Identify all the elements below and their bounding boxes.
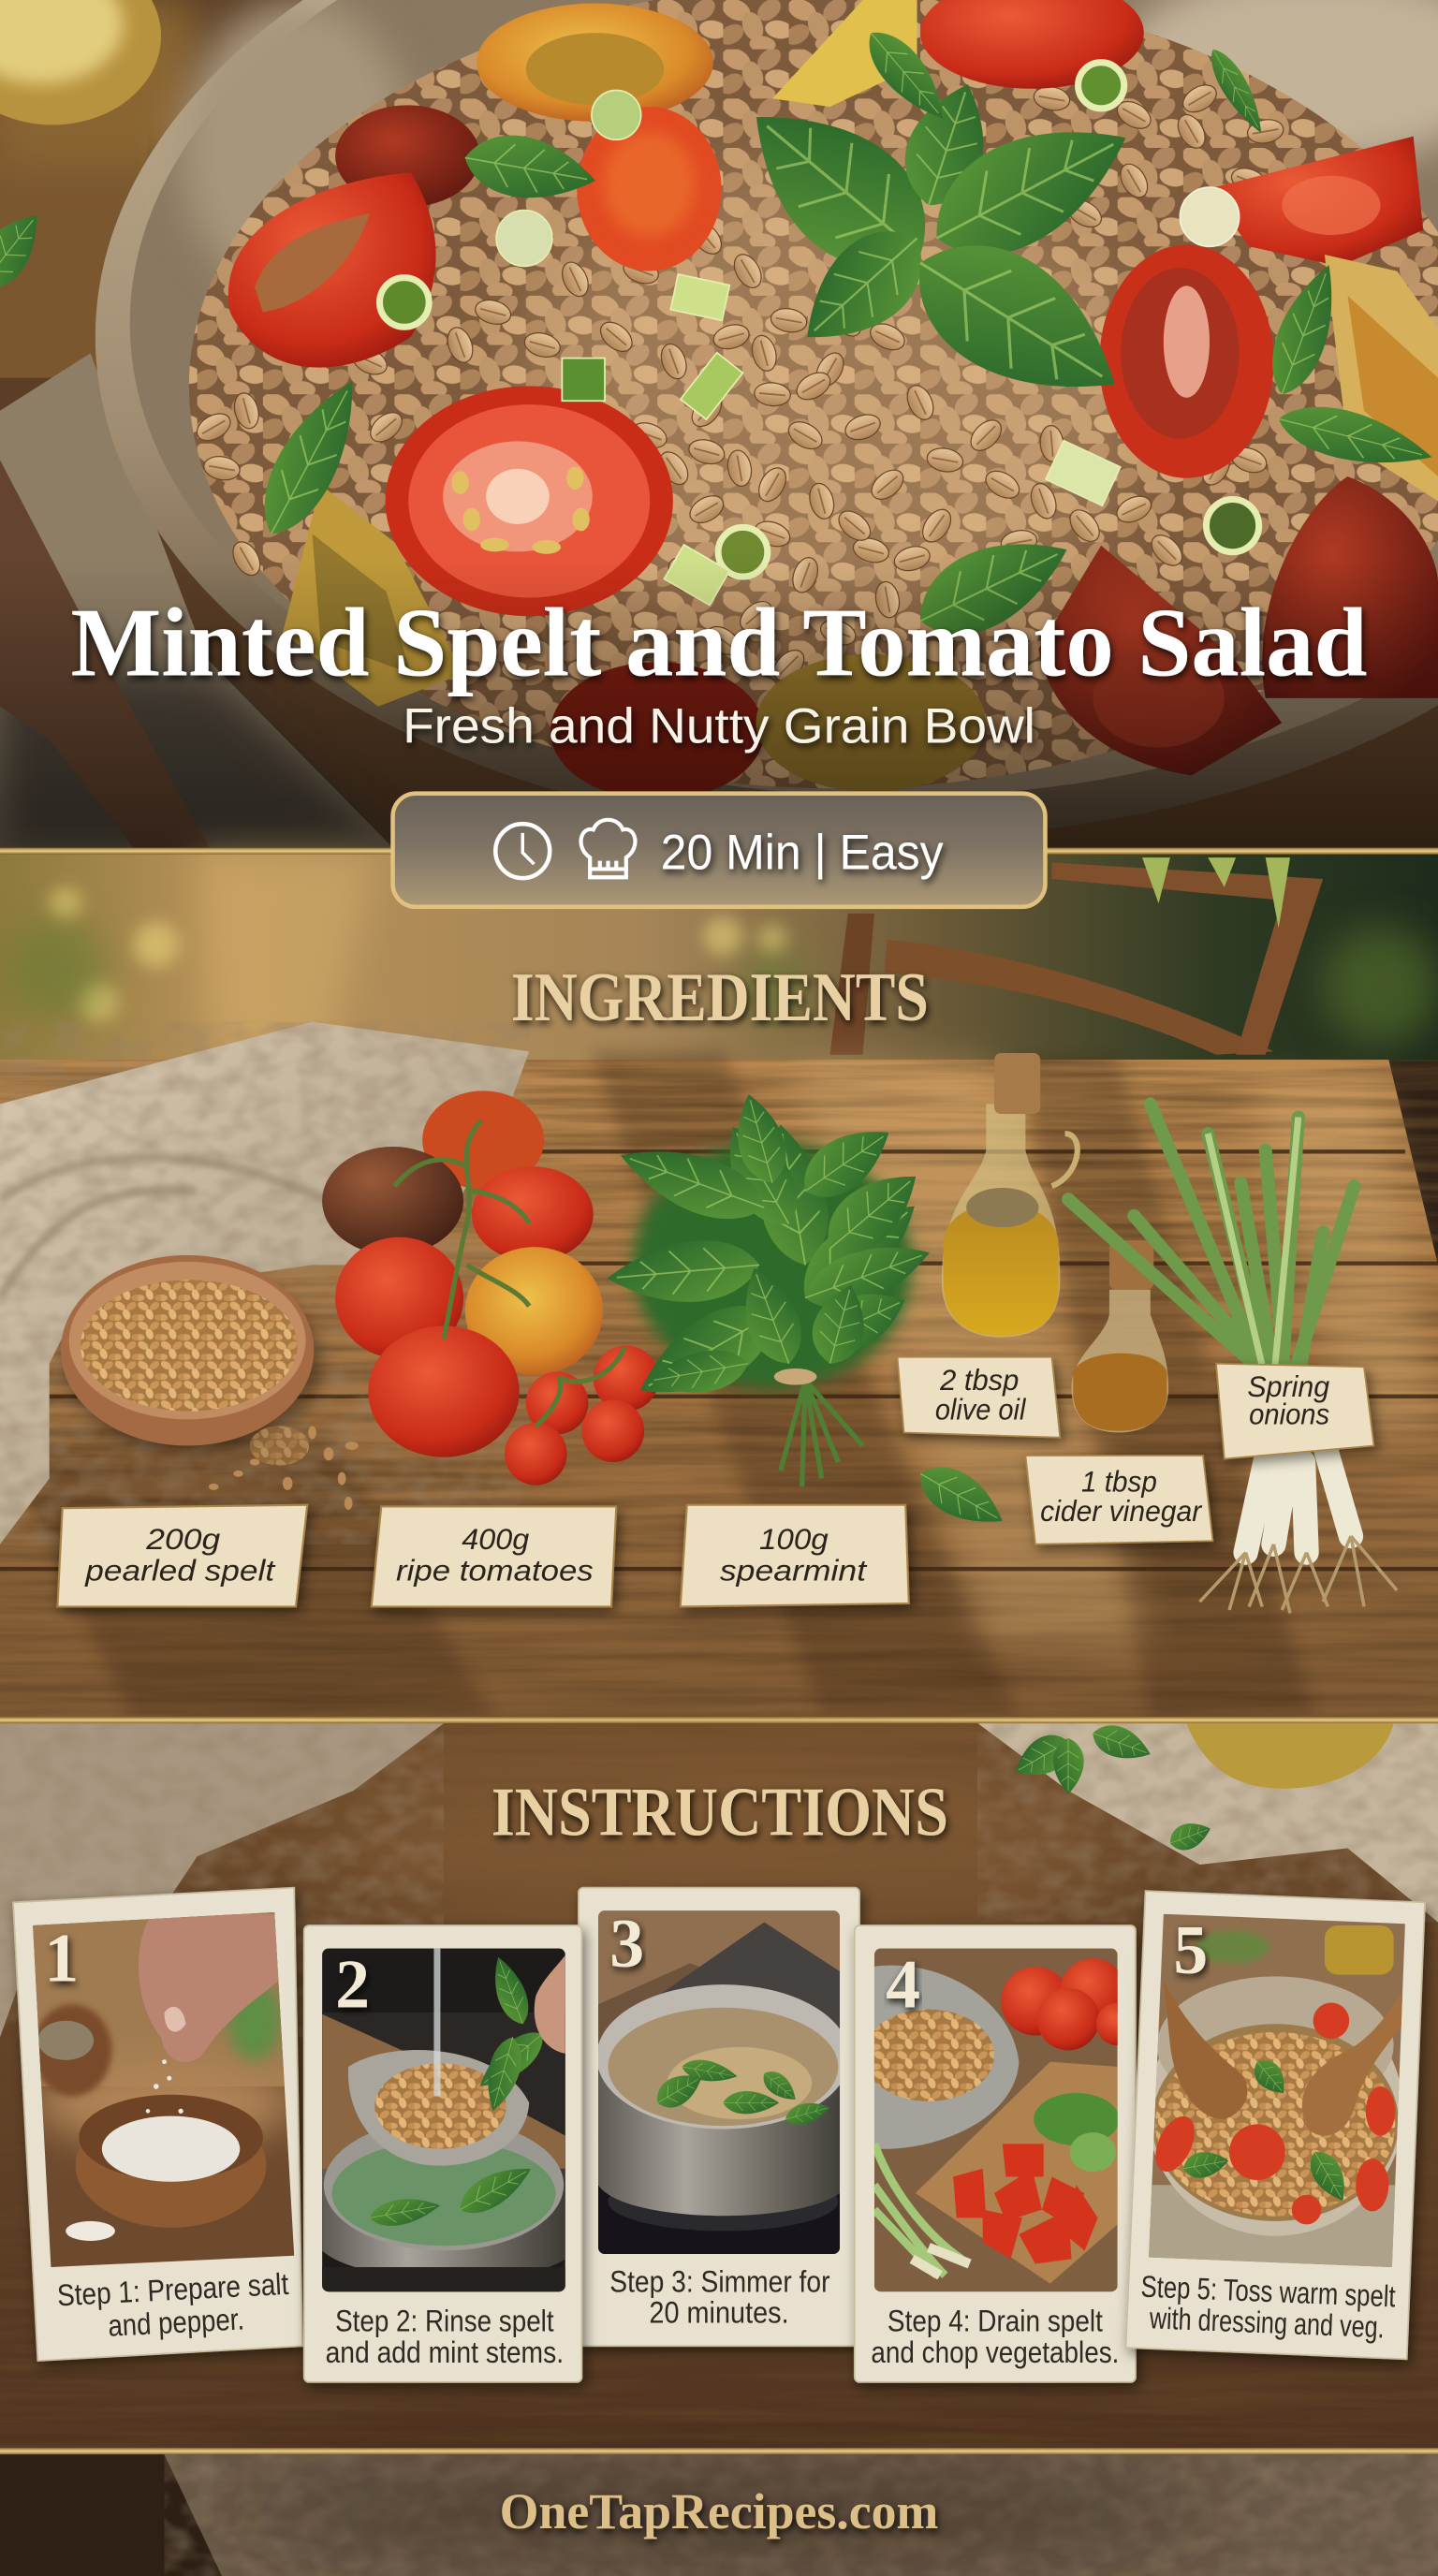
ceramic bowl — [95, 0, 1438, 838]
step card 4 — [855, 1925, 1139, 2382]
panel: ingredients — [0, 855, 1438, 1717]
wooden fork — [0, 460, 211, 849]
heading: ingredients: INGREDIENTS — [511, 959, 929, 1035]
number 5: 5 — [1173, 1911, 1208, 1988]
website: OneTapRecipes.com — [500, 2483, 938, 2539]
grain mound — [189, 0, 1438, 788]
label: spring onions — [1216, 1364, 1374, 1459]
label: ripe tomatoes: 400g — [462, 1522, 530, 1556]
caption 2: and add mint stems. — [326, 2335, 564, 2369]
caption 2: Step 2: Rinse spelt — [335, 2304, 554, 2337]
label: pearled spelt — [57, 1505, 307, 1606]
caption 1: and pepper. — [108, 2302, 245, 2343]
panel: instructions — [0, 1719, 1438, 2448]
step card 2 — [304, 1925, 581, 2382]
linen cloth — [0, 353, 394, 849]
label: cider vinegar: 1 tbsp — [1081, 1465, 1157, 1499]
heading: instructions: INSTRUCTIONS — [492, 1773, 948, 1850]
label: olive oil: olive oil — [935, 1392, 1026, 1426]
tomatoes in bowl — [228, 0, 1438, 800]
oil glass — [1186, 1723, 1394, 1789]
icon: spring onions — [1068, 1104, 1397, 1614]
caption 3: 20 minutes. — [649, 2296, 789, 2330]
caption 4 — [871, 2304, 1119, 2369]
panel: footer — [0, 2448, 1438, 2576]
label: spearmint: 100g — [759, 1522, 829, 1556]
gold divider and time badge — [0, 794, 1438, 907]
step card 5 — [1125, 1891, 1425, 2359]
wood background — [0, 1723, 1438, 2448]
number 1: 1 — [44, 1920, 79, 1997]
linen left — [0, 1723, 444, 2037]
hero table background — [0, 0, 1438, 849]
step card 1 — [13, 1888, 304, 2361]
vine leaves — [1142, 857, 1290, 929]
wooden chair — [829, 862, 1323, 1055]
loose spelt grains — [209, 1426, 359, 1510]
label: spring onions: Spring — [1247, 1369, 1330, 1403]
icon: tomatoes on the vine — [322, 1090, 659, 1486]
image: drained spelt and chopped vegetables — [863, 1949, 1139, 2291]
icon: cider vinegar bottle — [1072, 1240, 1168, 1432]
label: pearled spelt: 200g — [145, 1522, 221, 1556]
caption 1 — [56, 2267, 291, 2345]
spring onion slices — [380, 63, 1259, 606]
caption 1: Step 1: Prepare salt — [56, 2267, 289, 2312]
label: spearmint — [681, 1505, 909, 1606]
image: seasoning bowl — [24, 1906, 304, 2276]
label: olive oil — [897, 1357, 1060, 1438]
linen towel — [0, 1022, 529, 1544]
mint leaves garnish — [244, 20, 1438, 654]
label: cider vinegar — [1025, 1456, 1213, 1544]
icon: olive oil bottle — [942, 1053, 1078, 1338]
garden bokeh background — [0, 855, 1438, 1061]
label: cider vinegar: cider vinegar — [1040, 1494, 1203, 1528]
number 2: 2 — [335, 1946, 370, 2023]
subtitle: Fresh and Nutty Grain Bowl — [403, 698, 1035, 754]
number 3: 3 — [609, 1905, 644, 1982]
label: spring onions: onions — [1249, 1398, 1329, 1431]
herb sprig — [1006, 1719, 1214, 1855]
icon: bowl of pearled spelt — [61, 1255, 322, 1453]
title: Minted Spelt and Tomato Salad — [70, 587, 1368, 696]
caption 4: and chop vegetables. — [871, 2335, 1119, 2369]
linen right — [977, 1723, 1438, 1922]
footer gold line — [0, 2448, 1438, 2454]
green leaf on table — [0, 201, 54, 301]
image: simmering pot — [596, 1910, 850, 2254]
wooden table — [0, 1051, 1438, 1717]
step card 3 — [579, 1888, 859, 2346]
label: pearled spelt: pearled spelt — [84, 1553, 276, 1587]
icon: spearmint bunch — [605, 1089, 938, 1486]
number 4: 4 — [886, 1946, 920, 2023]
badge — [393, 794, 1045, 907]
caption 3 — [609, 2264, 830, 2330]
glass of oil — [0, 0, 161, 124]
image: rinsing spelt — [322, 1949, 565, 2291]
panel: hero salad bowl — [0, 0, 1438, 849]
dark title vignette — [0, 559, 1438, 849]
label: ripe tomatoes — [372, 1506, 616, 1606]
icon: single mint leaf — [910, 1455, 1014, 1539]
gold divider — [0, 1717, 1438, 1723]
icon: clock — [495, 824, 550, 878]
label: olive oil: 2 tbsp — [939, 1363, 1019, 1397]
label: spearmint: spearmint — [720, 1553, 867, 1587]
label: ripe tomatoes: ripe tomatoes — [396, 1553, 594, 1587]
caption 3: Step 3: Simmer for — [609, 2264, 830, 2298]
caption 2 — [326, 2304, 564, 2369]
time and difficulty text: 20 Min | Easy — [661, 825, 944, 880]
caption 5 — [1139, 2270, 1396, 2345]
image: tossing the salad — [1142, 1906, 1414, 2276]
caption 4: Step 4: Drain spelt — [888, 2304, 1103, 2337]
icon: chef hat — [581, 820, 635, 877]
